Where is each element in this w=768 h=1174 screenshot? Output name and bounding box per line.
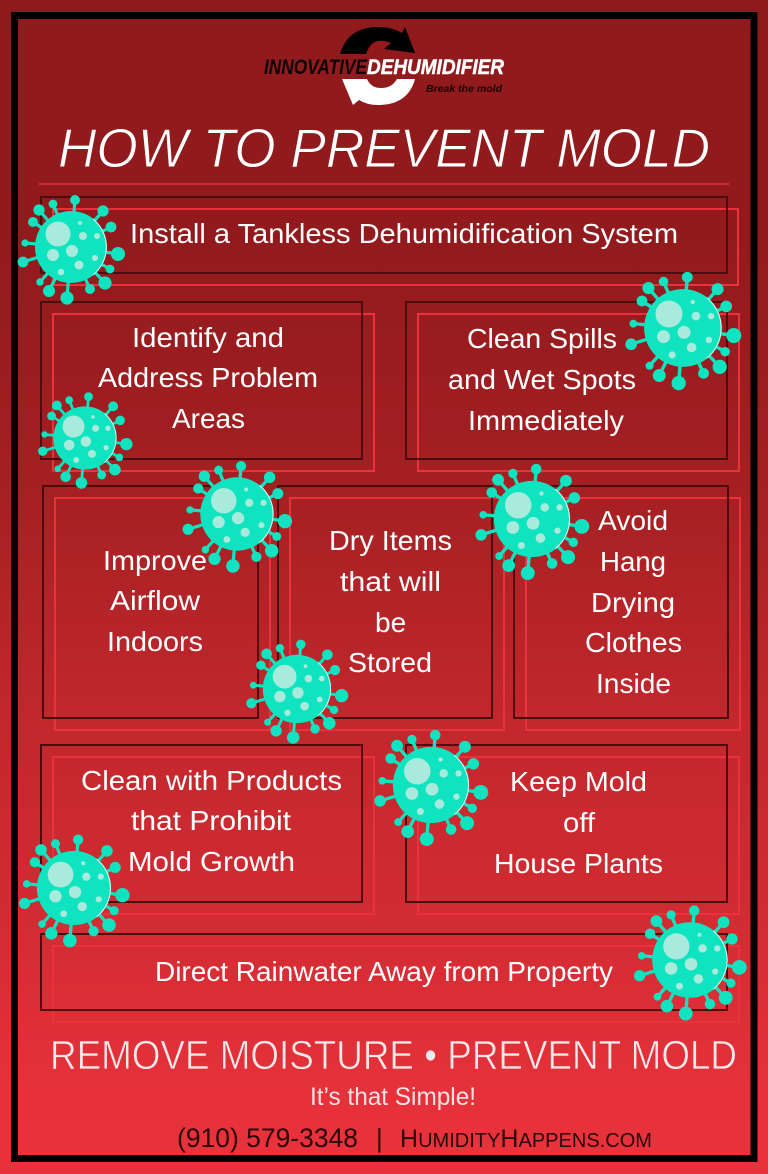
panel: dry items: Dry Items — [329, 525, 452, 556]
panel: clean with products: Clean with Products — [81, 765, 342, 796]
website: HUMIDITYHAPPENS.COM — [400, 1125, 652, 1153]
panel: house plants — [406, 745, 739, 914]
panel: identify problem areas: Identify and — [132, 322, 284, 353]
contact line — [177, 1123, 652, 1153]
panel: clean spills — [406, 302, 739, 471]
panel: identify problem areas: Address Problem — [98, 362, 318, 393]
panel: improve airflow: Improve — [103, 545, 207, 576]
panel: dry items — [278, 486, 504, 730]
logo wordmark dark: INNOVATIVE — [264, 56, 368, 79]
panel: dry items: Stored — [348, 647, 432, 678]
panel: house plants: House Plants — [494, 848, 663, 879]
icon: mold spore 6 — [246, 640, 348, 744]
panel: clean spills: and Wet Spots — [448, 364, 636, 395]
panel: avoid hang drying — [514, 486, 740, 730]
panel: clean with products: Mold Growth — [128, 846, 295, 877]
icon: mold spore 1 — [18, 195, 125, 305]
icon: mold spore 9 — [634, 905, 747, 1020]
panel: clean spills: Immediately — [468, 405, 624, 436]
panel: improve airflow: Indoors — [107, 626, 203, 657]
panel: house plants: Keep Mold — [510, 766, 647, 797]
title rule — [39, 183, 729, 185]
logo tagline: Break the mold — [426, 84, 503, 95]
panel: avoid hang drying: Clothes — [585, 627, 682, 658]
panel: identify problem areas — [41, 302, 374, 471]
panel: clean with products: that Prohibit — [131, 805, 291, 836]
panel: direct rainwater — [41, 934, 739, 1022]
panel: clean with products — [41, 745, 374, 914]
tagline: It’s that Simple! — [310, 1083, 476, 1111]
title: HOW TO PREVENT MOLD — [58, 117, 710, 179]
panel: avoid hang drying: Hang — [600, 546, 666, 577]
icon: mold spore 3 — [38, 392, 133, 489]
logo: Innovative Dehumidifier — [264, 27, 505, 105]
icon: mold spore 2 — [625, 272, 741, 390]
panel: avoid hang drying: Avoid — [598, 505, 668, 536]
panel: avoid hang drying: Inside — [596, 668, 671, 699]
panel: clean spills: Clean Spills — [467, 323, 617, 354]
icon: mold spore 5 — [475, 464, 589, 580]
panel: improve airflow: Airflow — [110, 585, 201, 616]
panel: install system — [41, 197, 738, 285]
panel: avoid hang drying: Drying — [591, 587, 675, 618]
logo wordmark white: DEHUMIDIFIER — [367, 56, 505, 79]
phone number: (910) 579-3348 — [177, 1123, 358, 1153]
icon: mold spore 7 — [374, 730, 488, 846]
panel: dry items: that will — [340, 566, 441, 597]
separator: | — [376, 1123, 383, 1153]
icon: mold spore 4 — [183, 461, 292, 573]
panel: identify problem areas: Areas — [172, 403, 245, 434]
panel: house plants: off — [563, 807, 595, 838]
icon: mold spore 8 — [19, 834, 130, 947]
panel: direct rainwater: Direct Rainwater Away from Property — [155, 956, 613, 987]
icon: black upper arrow — [340, 27, 415, 54]
panel: install system: Install a Tankless Dehumidification System — [130, 218, 678, 249]
icon: white lower arrow — [342, 79, 415, 105]
panel: dry items: be — [375, 607, 406, 638]
panel: improve airflow — [43, 486, 270, 730]
